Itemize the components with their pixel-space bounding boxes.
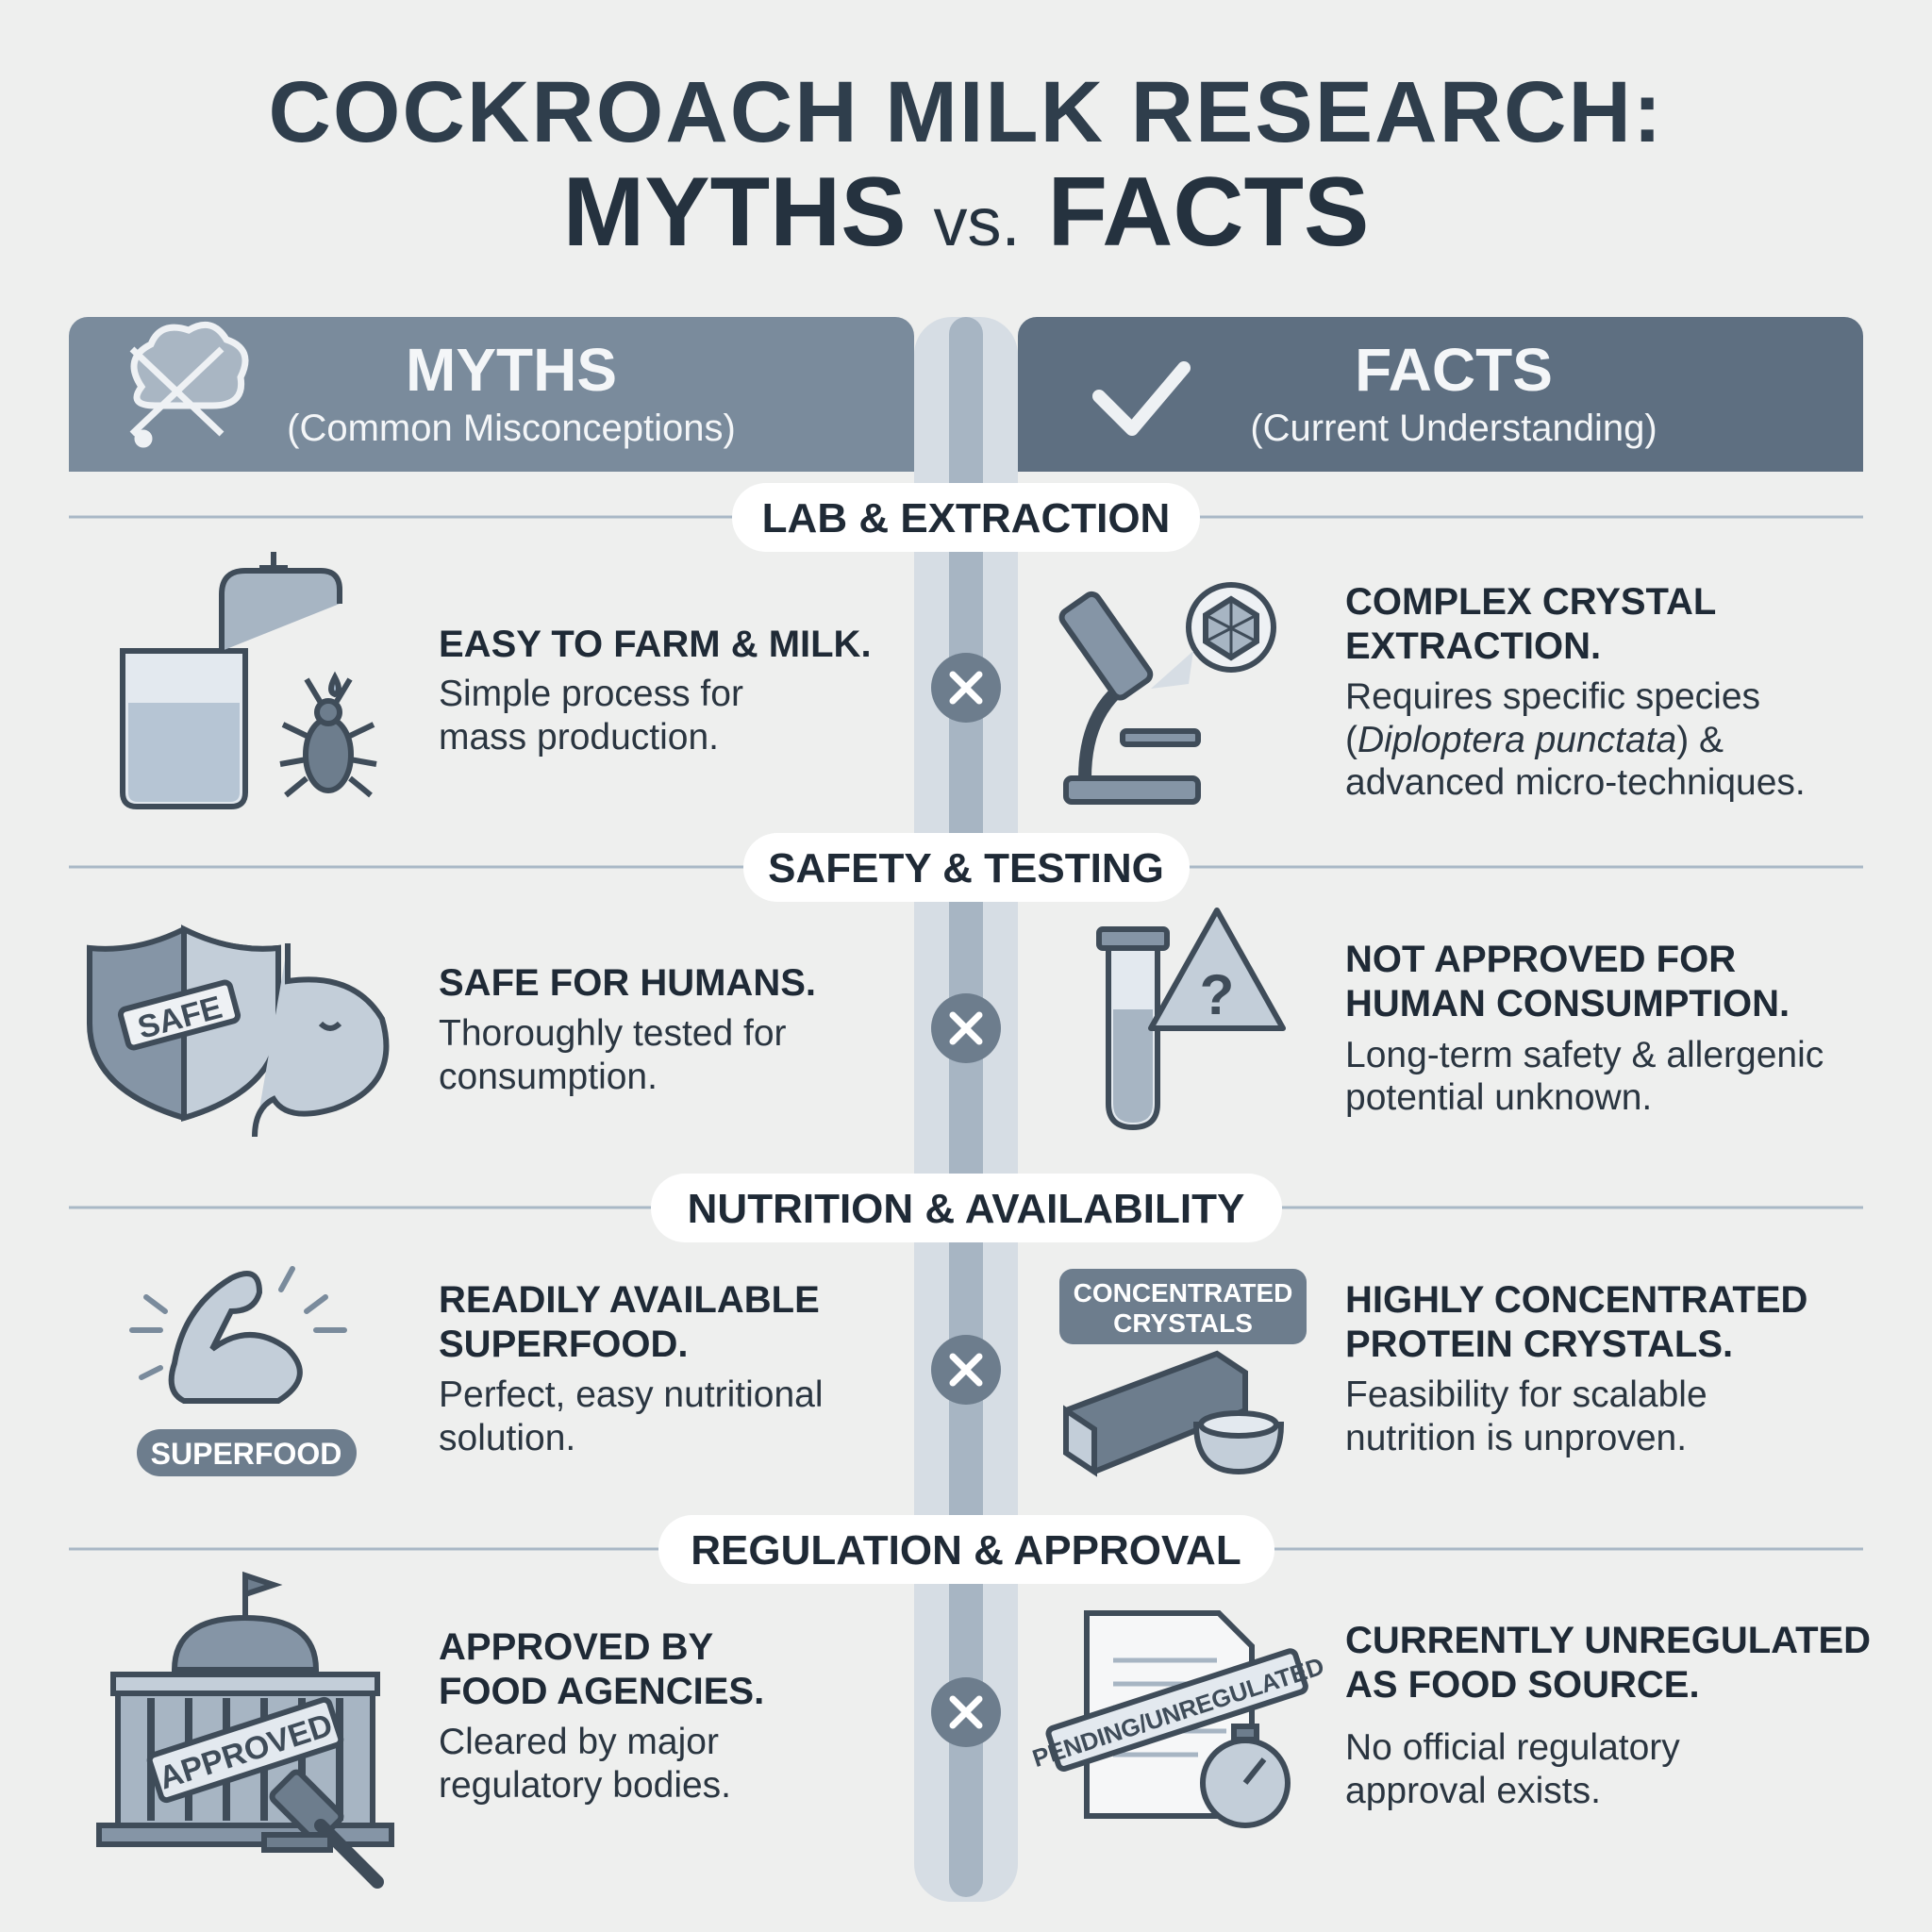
text: fact 2: potential unknown.: [1345, 1077, 1652, 1118]
text: fact 1: [1345, 581, 1806, 803]
text: myth 2: SAFE FOR HUMANS.: [439, 962, 816, 1004]
text: myth 1: Simple process for: [439, 674, 743, 714]
x markers: [931, 653, 1001, 1747]
text: myth 3: SUPERFOOD.: [439, 1324, 688, 1365]
icon: document pending stopwatch: PENDING/UNREGULATED: [1029, 1652, 1327, 1773]
text: fact 1: COMPLEX CRYSTAL: [1345, 581, 1716, 623]
text: myth 4: FOOD AGENCIES.: [439, 1671, 764, 1712]
pill: lab & extraction: LAB & EXTRACTION: [762, 495, 1170, 541]
text: myth 1: [439, 624, 872, 758]
pill: nutrition: NUTRITION & AVAILABILITY: [688, 1186, 1244, 1232]
text: fact 2: Long-term safety & allergenic: [1345, 1035, 1824, 1075]
pill: lab & extraction: [732, 483, 1200, 552]
pill: safety & testing: [743, 833, 1190, 902]
icon: shield stomach: SAFE: [134, 990, 225, 1046]
text: fact 3: [1345, 1279, 1807, 1458]
header: myths: MYTHS: [406, 336, 617, 404]
header: facts: [1018, 317, 1863, 472]
icon: crystals: [1059, 1269, 1307, 1472]
icon: muscle superfood: [132, 1269, 357, 1476]
header: myths: [69, 317, 914, 472]
icon: microscope: [1058, 585, 1274, 802]
text: myth 1: mass production.: [439, 717, 719, 758]
icon: crystals: CRYSTALS: [1113, 1308, 1253, 1338]
text: myth 4: Cleared by major: [439, 1722, 719, 1762]
text: fact 1: (Diploptera punctata) &: [1345, 720, 1724, 760]
icon: check: [1099, 368, 1184, 429]
icon: test tube warning: [1099, 910, 1283, 1127]
icon: crossed thought: [132, 325, 245, 444]
icon: government approved gavel: APPROVED: [155, 1707, 337, 1796]
text: fact 2: NOT APPROVED FOR: [1345, 939, 1736, 980]
icon: test tube warning: ?: [1200, 963, 1234, 1026]
text: myth 1: EASY TO FARM & MILK.: [439, 624, 872, 665]
pill: regulation: [658, 1515, 1274, 1584]
text: myth 4: regulatory bodies.: [439, 1765, 731, 1806]
text: myth 3: [439, 1279, 824, 1458]
central divider: [914, 317, 1018, 1902]
icon: crystals: CONCENTRATED: [1074, 1278, 1292, 1307]
text: myth 2: [439, 962, 816, 1097]
pill: safety & testing: SAFETY & TESTING: [768, 845, 1164, 891]
text: fact 3: HIGHLY CONCENTRATED: [1345, 1279, 1807, 1321]
text: myth 3: Perfect, easy nutritional: [439, 1374, 824, 1415]
header: myths: (Common Misconceptions): [287, 408, 736, 449]
text: fact 4: No official regulatory: [1345, 1727, 1680, 1768]
text: fact 3: Feasibility for scalable: [1345, 1374, 1707, 1415]
header: facts: (Current Understanding): [1250, 408, 1657, 449]
icon: shield stomach: [90, 929, 386, 1137]
icon: muscle superfood: SUPERFOOD: [151, 1437, 341, 1471]
text: fact 2: [1345, 939, 1824, 1118]
text: fact 1: Requires specific species: [1345, 676, 1760, 717]
section lines: [69, 517, 1863, 1549]
text: myth 4: APPROVED BY: [439, 1626, 713, 1668]
text: fact 2: HUMAN CONSUMPTION.: [1345, 983, 1790, 1024]
text: fact 1: EXTRACTION.: [1345, 625, 1601, 667]
icon: government approved gavel: [99, 1575, 391, 1882]
text: fact 4: [1345, 1620, 1871, 1811]
title: MYTHS vs. FACTS: [563, 158, 1369, 267]
text: myth 2: Thoroughly tested for: [439, 1013, 787, 1054]
text: myth 3: solution.: [439, 1418, 575, 1458]
icon: document pending stopwatch: [1029, 1613, 1327, 1825]
icon: beaker tap cockroach: [123, 552, 376, 807]
text: fact 3: PROTEIN CRYSTALS.: [1345, 1324, 1733, 1365]
title: COCKROACH MILK RESEARCH:: [268, 64, 1664, 160]
text: fact 4: AS FOOD SOURCE.: [1345, 1664, 1700, 1706]
text: myth 4: [439, 1626, 764, 1806]
text: myth 2: consumption.: [439, 1057, 658, 1097]
title: [268, 64, 1664, 267]
text: fact 3: nutrition is unproven.: [1345, 1418, 1687, 1458]
text: myth 3: READILY AVAILABLE: [439, 1279, 820, 1321]
text: fact 4: CURRENTLY UNREGULATED: [1345, 1620, 1871, 1661]
header: facts: FACTS: [1355, 336, 1553, 404]
pill: regulation: REGULATION & APPROVAL: [691, 1527, 1241, 1574]
pill: nutrition: [651, 1174, 1282, 1242]
text: fact 4: approval exists.: [1345, 1771, 1601, 1811]
text: fact 1: advanced micro-techniques.: [1345, 762, 1806, 803]
